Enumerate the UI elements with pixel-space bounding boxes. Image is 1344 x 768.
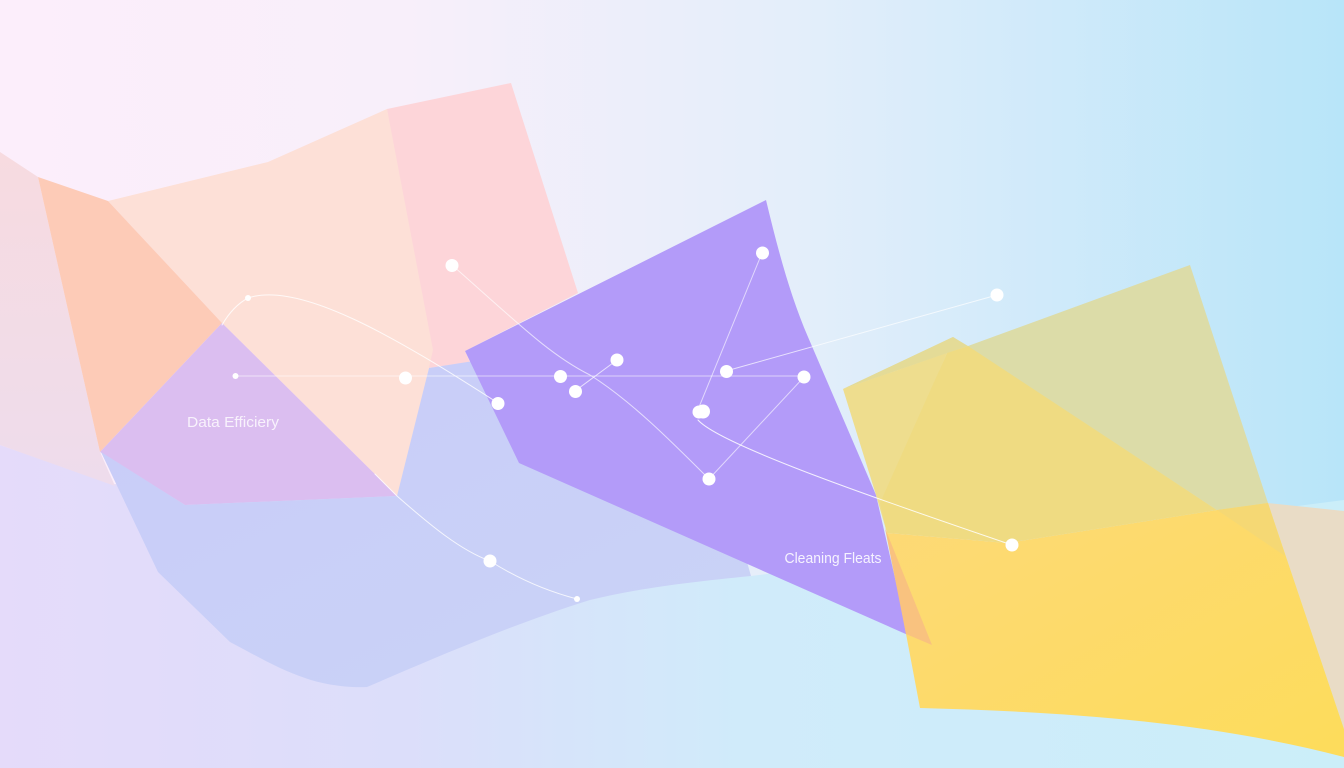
panel: orange overlap tip — [885, 528, 932, 645]
panel: lavender triangle — [100, 323, 397, 505]
panel: bright yellow sheet — [887, 503, 1344, 757]
panel: darker yellow facet — [1217, 503, 1285, 556]
panel: purple sheet — [465, 200, 908, 635]
panel: middle yellow facet — [880, 346, 1217, 543]
label: Cleaning Fleats: Cleaning Fleats — [784, 550, 882, 567]
panel: pale pink left band — [0, 152, 115, 486]
panel: sliver at top of yellow sheet — [843, 337, 968, 389]
panel: beige corner — [1268, 503, 1344, 729]
panel: pink sheet — [387, 83, 578, 368]
panel: peach sheet — [108, 109, 433, 496]
panel: orange sheet — [38, 177, 222, 452]
network lines — [222, 253, 1012, 599]
network nodes — [232, 246, 1018, 602]
label: Data Efficiery: Data Efficiery — [187, 414, 280, 431]
background wave: lower band — [0, 445, 1344, 768]
panel: periwinkle sheet — [101, 360, 751, 687]
panel: olive sheet — [843, 265, 1268, 510]
panel: left pale yellow facet — [843, 353, 947, 533]
